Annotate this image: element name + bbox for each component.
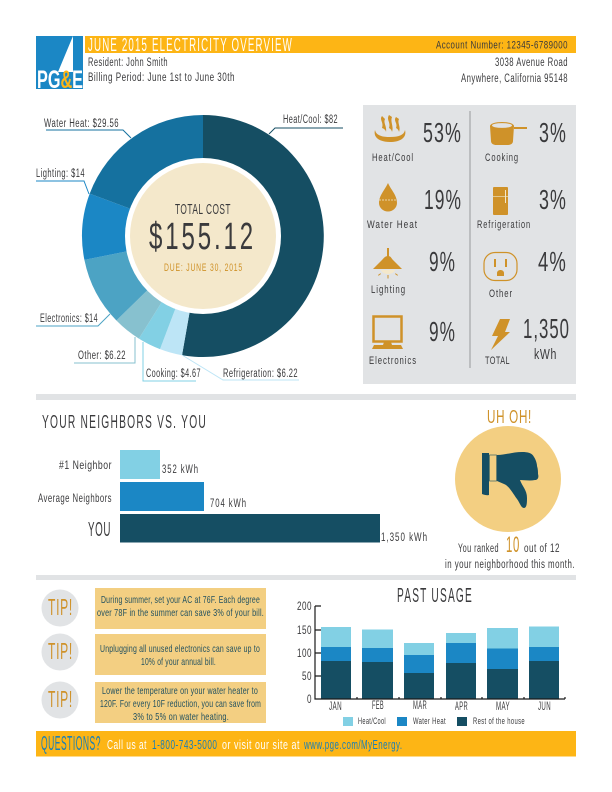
stacked bar chart: past usage: JAN bbox=[329, 701, 342, 713]
tip 1 bbox=[42, 588, 266, 629]
label: electronics: Electronics: $14 bbox=[40, 313, 98, 325]
footer: questions bar: 1-800-743-5000 bbox=[152, 737, 218, 752]
tip 2: Unplugging all unused electronics can save up to bbox=[100, 643, 260, 655]
value: total bbox=[485, 313, 570, 367]
label: electronics bbox=[36, 313, 110, 326]
stacked bar chart: past usage: 50 bbox=[302, 669, 312, 683]
label: cooking bbox=[143, 342, 201, 381]
address: 3038 Avenue Road bbox=[495, 57, 568, 69]
icon: water drop bbox=[379, 183, 397, 212]
icon: cooking pot bbox=[490, 122, 527, 145]
value: refrigeration: 3% bbox=[539, 184, 567, 215]
address bbox=[461, 57, 568, 85]
value: lighting: Lighting bbox=[371, 284, 406, 296]
panel: usage breakdown bbox=[363, 105, 576, 384]
tip 1: During summer, set your AC at 76F. Each degree bbox=[101, 594, 260, 606]
value: water heat: 19% bbox=[424, 184, 462, 215]
value: water heat: Water Heat bbox=[367, 219, 418, 231]
logo: PG&E bbox=[36, 36, 83, 94]
bar chart: neighbors comparison: #1 Neighbor bbox=[59, 458, 112, 472]
label: cooking: Cooking: $4.67 bbox=[146, 368, 201, 380]
icon: refrigerator bbox=[493, 187, 508, 215]
value: other: Other bbox=[489, 288, 513, 300]
value: electronics bbox=[369, 316, 456, 367]
bar chart: neighbors comparison: Average Neighbors bbox=[38, 491, 112, 505]
donut chart: total cost: DUE: JUNE 30, 2015 bbox=[164, 262, 243, 274]
value: lighting bbox=[371, 246, 456, 296]
heading: neighbors: YOUR NEIGHBORS VS. YOU bbox=[42, 412, 207, 432]
label: water heat: Water Heat: $29.56 bbox=[44, 118, 119, 130]
bar chart: neighbors comparison: 1,350 kWh bbox=[381, 532, 428, 544]
stacked bar chart: past usage: MAY bbox=[496, 701, 510, 713]
label: heat/cool: Heat/Cool: $82 bbox=[283, 114, 338, 126]
footer: questions bar: QUESTIONS? bbox=[41, 733, 101, 755]
stacked bar chart: past usage: 200 bbox=[297, 599, 312, 613]
tip 1: TIP! bbox=[48, 594, 73, 620]
tip 3: 3% to 5% on water heating. bbox=[133, 711, 229, 723]
label: water heat bbox=[44, 118, 131, 138]
tip 3: 120F. For every 10F reduction, you can save from bbox=[100, 698, 261, 710]
label: lighting bbox=[36, 168, 89, 194]
value: other: 4% bbox=[538, 246, 567, 277]
value: electronics: Electronics bbox=[369, 355, 417, 367]
bar chart: neighbors comparison: YOU bbox=[88, 519, 111, 541]
value: lighting: 9% bbox=[429, 246, 456, 277]
tip 2: TIP! bbox=[48, 638, 73, 664]
value: cooking bbox=[485, 117, 567, 164]
heading: past usage: PAST USAGE bbox=[397, 585, 473, 607]
chart legend: Water Heat bbox=[413, 716, 446, 726]
footer: questions bar bbox=[36, 731, 576, 756]
icon: wall outlet bbox=[484, 252, 517, 280]
icon: ceiling lamp bbox=[373, 248, 402, 278]
bar chart: neighbors comparison: 352 kWh bbox=[162, 464, 199, 476]
stacked bar chart: past usage: MAR bbox=[413, 700, 427, 712]
donut chart: total cost bbox=[82, 115, 324, 357]
value: total: TOTAL bbox=[485, 355, 510, 367]
tip 3: TIP! bbox=[48, 686, 73, 712]
chart legend bbox=[343, 716, 525, 726]
donut chart: total cost: TOTAL COST bbox=[175, 201, 231, 218]
label: other: Other: $6.22 bbox=[78, 350, 126, 362]
tip 3 bbox=[42, 682, 266, 723]
stacked bar chart: past usage: 100 bbox=[297, 646, 312, 660]
callout: uh oh: 10 bbox=[506, 532, 520, 557]
stacked bar chart: past usage: 0 bbox=[307, 692, 312, 706]
tip 3: Lower the temperature on your water heater to bbox=[102, 685, 258, 697]
value: heat/cool: Heat/Cool bbox=[372, 152, 414, 164]
label: lighting: Lighting: $14 bbox=[36, 168, 85, 180]
value: refrigeration bbox=[477, 184, 567, 231]
resident details bbox=[88, 57, 235, 84]
chart legend: Rest of the house bbox=[473, 716, 525, 726]
callout: uh oh bbox=[445, 407, 575, 571]
stacked bar chart: past usage: FEB bbox=[372, 700, 384, 712]
value: total: 1,350 bbox=[523, 313, 570, 344]
icon: thumbs down bbox=[482, 452, 538, 508]
label: heat/cool bbox=[269, 114, 343, 134]
value: electronics: 9% bbox=[429, 316, 456, 347]
stacked bar chart: past usage bbox=[297, 599, 565, 713]
logo: PG&E: PG&E bbox=[37, 66, 83, 94]
icon: heat/cool bbox=[375, 115, 405, 142]
donut chart: total cost: $155.12 bbox=[149, 216, 256, 258]
callout: uh oh: UH OH! bbox=[487, 407, 532, 427]
value: water heat bbox=[367, 184, 462, 231]
icon: lightning bolt bbox=[491, 319, 510, 350]
bar chart: neighbors comparison: 704 kWh bbox=[210, 498, 247, 510]
value: other bbox=[489, 246, 567, 300]
label: other bbox=[74, 337, 135, 363]
footer: questions bar: www.pge.com/MyEnergy. bbox=[303, 737, 402, 752]
bar chart: neighbors comparison bbox=[38, 450, 428, 544]
tip 2 bbox=[42, 634, 266, 675]
value: refrigeration: Refrigeration bbox=[477, 219, 531, 231]
chart legend: Heat/Cool bbox=[358, 716, 386, 726]
stacked bar chart: past usage: 150 bbox=[297, 623, 312, 637]
icon: computer monitor bbox=[372, 316, 403, 349]
resident details: Resident: John Smith bbox=[88, 57, 168, 69]
value: cooking: 3% bbox=[539, 117, 567, 148]
value: cooking: Cooking bbox=[485, 152, 519, 164]
callout: uh oh: You ranked bbox=[458, 543, 499, 555]
stacked bar chart: past usage: APR bbox=[455, 701, 468, 713]
callout: uh oh: out of 12 bbox=[524, 543, 560, 555]
value: total: kWh bbox=[534, 346, 557, 363]
value: heat/cool: 53% bbox=[423, 117, 462, 148]
resident details: Billing Period: June 1st to June 30th bbox=[88, 72, 235, 84]
tip 1: over 78F in the summer can save 3% of your bill. bbox=[97, 607, 264, 619]
stacked bar chart: past usage: JUN bbox=[538, 701, 551, 713]
label: refrigeration bbox=[182, 355, 299, 380]
footer: questions bar: or visit our site at bbox=[222, 737, 300, 752]
value: heat/cool bbox=[372, 117, 462, 164]
label: refrigeration: Refrigeration: $6.22 bbox=[223, 368, 298, 380]
tip 2: 10% of your annual bill. bbox=[141, 656, 216, 668]
footer: questions bar: Call us at bbox=[107, 737, 147, 752]
header bar with title: JUNE 2015 ELECTRICITY OVERVIEW bbox=[88, 35, 293, 55]
